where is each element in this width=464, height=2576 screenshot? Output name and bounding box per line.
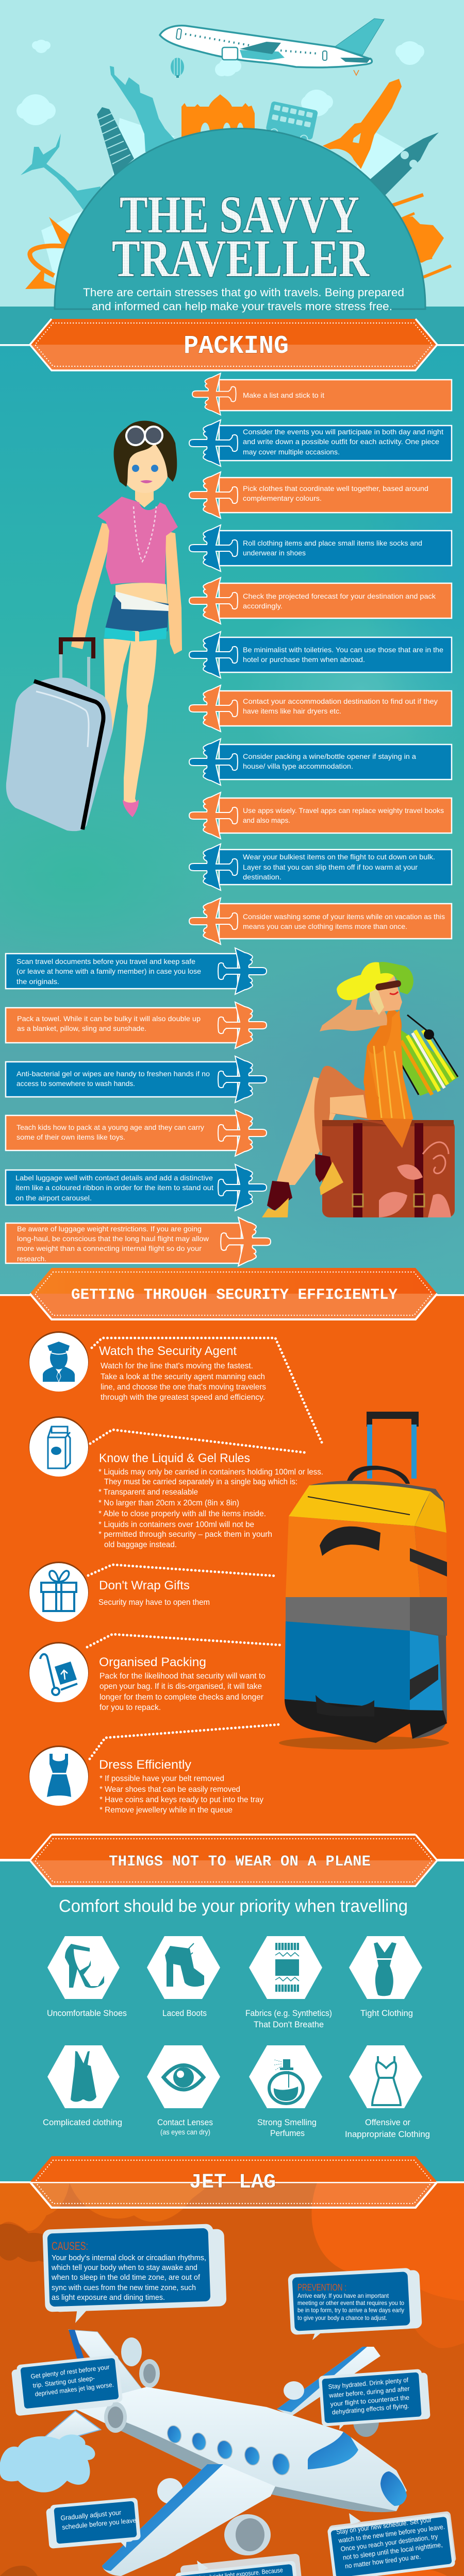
callout: rest: trip. Starting out sleep- — [32, 2375, 95, 2389]
item: uncomfortable shoes: Uncomfortable Shoes — [47, 2008, 127, 2018]
tip 1 — [192, 373, 452, 415]
tip 5: Check the projected forecast for your destination and pack — [243, 592, 436, 600]
item: offensive clothing: Offensive or — [365, 2117, 410, 2127]
tip 13: Pack a towel. While it can be bulky it will also double up — [17, 1014, 201, 1023]
tip 3: Pick clothes that coordinate well together, based around — [243, 484, 428, 493]
tip 17: research. — [17, 1255, 46, 1263]
icon: landmarks skyline — [21, 66, 451, 289]
tip: liquid and gel rules: * Able to close properly with all the items inside. — [98, 1510, 266, 1518]
tip 12: (or leave at home with a family member) in case you lose — [16, 967, 201, 975]
tip: dress efficiently — [29, 1724, 281, 1815]
tip: dress efficiently: * Wear shoes that can be easily removed — [100, 1785, 240, 1794]
tip 8: house/ villa type accommodation. — [243, 762, 353, 770]
tip 9 — [189, 792, 452, 839]
item: laced boots — [147, 1936, 220, 2018]
tip 10: Wear your bulkiest items on the flight to cut down on bulk. — [243, 853, 435, 861]
heading: things not to wear — [30, 1835, 437, 1886]
callout: prevention: be in top form, try to arrive a few days early — [297, 2307, 404, 2314]
callout: hydrated: dehydrating effects of flying. — [332, 2402, 409, 2416]
heading: packing: PACKING — [184, 332, 289, 361]
tip 8: Consider packing a wine/bottle opener if staying in a — [243, 752, 416, 760]
tip: liquid and gel rules: * No larger than 20cm x 20cm (8in x 8in) — [98, 1499, 239, 1507]
tip: liquid and gel rules: old baggage instead. — [104, 1540, 177, 1549]
item: contact lenses — [147, 2045, 220, 2136]
tip: don't wrap gifts — [29, 1562, 277, 1622]
tip: dress efficiently: * Remove jewellery while in the queue — [100, 1806, 233, 1815]
dotted connector — [92, 1338, 323, 1445]
tip 11: means you can use clothing items more than once. — [243, 922, 407, 930]
icon: security agent — [29, 1331, 89, 1392]
callout: prevention: meeting or other event that requires you to — [297, 2299, 404, 2307]
tip 10: destination. — [243, 873, 281, 881]
tip 7: have items like hair dryers etc. — [243, 707, 341, 715]
tip 15 — [6, 1110, 267, 1156]
callout: hydrated: water before, during and after — [328, 2385, 410, 2399]
tip 4: underwear in shoes — [243, 549, 306, 557]
tip 11 — [189, 898, 452, 944]
item: strong perfumes: Strong Smelling — [257, 2117, 317, 2127]
tip: dress efficiently: * If possible have your belt removed — [100, 1774, 224, 1783]
tip 16: on the airport carousel. — [15, 1194, 92, 1202]
tip 6: hotel or purchase them when abroad. — [243, 655, 365, 664]
tip 13 — [6, 1002, 267, 1048]
callout: causes: CAUSES: — [52, 2240, 88, 2252]
tip 7: Contact your accommodation destination to find out if they — [243, 697, 438, 705]
icon: clouds — [16, 40, 424, 125]
callout: prevention: to give your body a chance to adjust. — [297, 2314, 387, 2321]
illustration: big airplane — [0, 2330, 407, 2576]
item: laced boots: Laced Boots — [162, 2008, 207, 2018]
intro text: There are certain stresses that go with travels. Being prepared — [83, 286, 404, 299]
tip 7 — [189, 685, 452, 732]
item: fabrics: Fabrics (e.g. Synthetics) — [245, 2008, 332, 2018]
list: packing tips left column — [6, 948, 271, 1266]
tip: watch the security agent — [29, 1331, 323, 1445]
callout: causes: sync with cues from the new time zone, such — [52, 2283, 196, 2292]
callout: hydrated — [319, 2369, 430, 2430]
item: contact lenses: Contact Lenses — [157, 2117, 213, 2127]
tip: watch the security agent: Watch the Security Agent — [99, 1344, 237, 1358]
tip: organised packing: for you to repack. — [100, 1703, 161, 1712]
heading: things not to wear: THINGS NOT TO WEAR ON A PLANE — [109, 1853, 371, 1871]
tip 11: Consider washing some of your items while on vacation as this — [243, 912, 445, 921]
title: TRAVELLER — [112, 229, 370, 288]
callout: new schedule: Once you reach your destination, try — [340, 2532, 439, 2553]
tip: liquid and gel rules: * permitted through security – pack them in yourh — [98, 1530, 272, 1539]
tip: watch the security agent: through with the greatest speed and efficiency. — [101, 1393, 265, 1402]
tip 6: Be minimalist with toiletries. You can use those that are in the — [243, 646, 443, 654]
tip 16: item like a coloured ribbon in order for the item to stand out — [15, 1183, 213, 1192]
tip 12 — [6, 948, 267, 994]
panel: hero — [0, 0, 464, 345]
dotted connector — [88, 1565, 277, 1576]
item: uncomfortable shoes — [47, 1936, 127, 2018]
icon: dress — [29, 1745, 89, 1806]
callout: causes: when to sleep in the old time zone, are out of — [51, 2273, 201, 2282]
callout: hydrated: your flight to counteract the — [330, 2394, 410, 2408]
callout: causes: as light exposure and dining times. — [52, 2293, 165, 2302]
tip 17: Be aware of luggage weight restrictions. If you are going — [17, 1225, 202, 1233]
tip: don't wrap gifts: Don't Wrap Gifts — [99, 1579, 190, 1592]
heading: packing — [30, 319, 437, 370]
callout: causes: Your body's internal clock or circadian rhythms, — [52, 2253, 206, 2262]
tip 3 — [189, 472, 452, 518]
item: fabrics — [245, 1936, 332, 2029]
panel: packing background — [0, 344, 464, 1295]
tip: liquid and gel rules — [29, 1416, 323, 1549]
tip 10 — [189, 844, 452, 890]
tip: dress efficiently: * Have coins and keys ready to put into the tray — [100, 1795, 263, 1804]
tip 15: Teach kids how to pack at a young age and they can carry — [16, 1123, 204, 1131]
callout: causes — [42, 2224, 227, 2323]
item: complicated clothing — [43, 2045, 122, 2127]
tip 12: Scan travel documents before you travel and keep safe — [16, 957, 195, 965]
tip 15: some of their own items like toys. — [16, 1133, 125, 1141]
heading: getting through security — [30, 1268, 437, 1319]
tip 8 — [189, 739, 452, 785]
tip 4: Roll clothing items and place small items like socks and — [243, 539, 422, 547]
tip: liquid and gel rules: * Transparent and resealable — [98, 1488, 198, 1497]
item: tight clothing: Tight Clothing — [360, 2008, 413, 2018]
callout: gradually adjust: Gradually adjust your — [60, 2509, 122, 2522]
tip 17: long-haul, be conscious that the long haul flight may allow — [17, 1234, 209, 1243]
callout: prevention: PREVENTION : — [297, 2282, 346, 2293]
dotted connector — [90, 1430, 308, 1453]
item: offensive clothing — [345, 2045, 430, 2139]
callout: new schedule: Stay on your new schedule. Set your — [336, 2516, 432, 2536]
item: contact lenses: (as eyes can dry) — [160, 2128, 210, 2136]
tip 14: Anti-bacterial gel or wipes are handy to freshen hands if no — [16, 1070, 210, 1078]
title: THE SAVVY — [120, 185, 359, 244]
tip 4 — [189, 525, 452, 571]
heading: jet lag — [30, 2156, 437, 2208]
callout: prevention: Arrive early. If you have an important — [297, 2292, 389, 2299]
dotted connector — [87, 1634, 281, 1647]
tip: watch the security agent: line, and choose the one that's moving travelers — [101, 1383, 266, 1392]
tip: organised packing: Organised Packing — [99, 1655, 206, 1669]
tip: liquid and gel rules: * Liquids in containers over 100ml will not be — [98, 1520, 254, 1529]
callout: prevention — [288, 2268, 422, 2340]
callout: new schedule — [327, 2511, 456, 2576]
tip 5 — [189, 578, 452, 624]
tip 3: complementary colours. — [243, 494, 322, 502]
tip: organised packing: open your bag. If it is dis-organised, it will take — [100, 1682, 262, 1691]
tip 6 — [189, 632, 452, 678]
tip 17 — [6, 1217, 271, 1266]
tip: organised packing — [29, 1634, 281, 1712]
item: complicated clothing: Complicated clothing — [43, 2117, 122, 2127]
subheading: comfort: Comfort should be your priority when travelling — [59, 1896, 408, 1916]
callout: rest — [11, 2354, 123, 2416]
callout: new schedule: no matter how tired you are. — [344, 2552, 421, 2570]
icon: gift — [29, 1562, 89, 1622]
tip: organised packing: Pack for the likelihood that security will want to — [100, 1672, 266, 1681]
callout: new schedule: watch to the new time before you leave. — [338, 2523, 445, 2545]
tip 16 — [6, 1164, 267, 1211]
heading: getting through security: GETTING THROUGH SECURITY EFFICIENTLY — [71, 1286, 397, 1304]
tip 2: Consider the events you will participate in both day and night — [243, 428, 443, 436]
tip 12: the originals. — [16, 977, 59, 986]
tip 2: and write down a possible outfit for each activity. One piece — [243, 437, 439, 446]
dome — [55, 129, 425, 309]
tip 10: Layer so that you can slip them off if too warm at your — [243, 863, 418, 871]
list: security tips — [29, 1331, 323, 1815]
tip 2: may cover multiple occasions. — [243, 448, 340, 456]
panel: things not to wear background — [0, 1859, 464, 2184]
tip: liquid and gel rules: Know the Liquid & Gel Rules — [99, 1451, 250, 1465]
panel: jet lag background — [0, 2181, 464, 2576]
tip: watch the security agent: Watch for the line that's moving the fastest. — [101, 1362, 253, 1370]
list: packing tips right column — [189, 373, 452, 944]
icon: hand trolley — [29, 1642, 89, 1702]
callouts: jet lag — [11, 2224, 456, 2576]
title — [112, 185, 370, 288]
intro text — [83, 286, 404, 313]
callout: gradually adjust — [46, 2498, 141, 2549]
tip 1: Make a list and stick to it — [243, 391, 324, 399]
callout: rest: Get plenty of rest before your — [30, 2363, 110, 2380]
icon: carton — [29, 1416, 89, 1477]
grid: things not to wear — [43, 1936, 430, 2139]
tip 9: Use apps wisely. Travel apps can replace weighty travel books — [243, 806, 444, 815]
callout: new schedule: not to sleep until the local nighttime, — [342, 2540, 443, 2562]
tip 13: as a blanket, pillow, sling and sunshade. — [17, 1024, 146, 1032]
panel: security background — [0, 1294, 464, 1861]
heading: jet lag: JET LAG — [189, 2171, 276, 2194]
tip: watch the security agent: Take a look at the security agent manning each — [101, 1372, 265, 1381]
illustration: rolling suitcase — [279, 1412, 449, 1750]
item: tight clothing — [349, 1936, 422, 2018]
illustration: girl with suitcase — [6, 421, 182, 831]
callout: gradually adjust: schedule before you leave. — [62, 2516, 138, 2531]
item: fabrics: That Don't Breathe — [254, 2020, 324, 2029]
tip 9: and also maps. — [243, 816, 290, 824]
tip: don't wrap gifts: Security may have to open them — [98, 1598, 210, 1607]
callout: rest: deprived makes jet lag worse. — [35, 2381, 114, 2398]
tip 14 — [6, 1056, 267, 1103]
callout: bright light — [175, 2553, 305, 2576]
tip 2 — [189, 420, 452, 466]
item: strong perfumes — [249, 2045, 322, 2138]
dotted connector — [90, 1724, 281, 1759]
icon: airplane — [160, 19, 384, 75]
tip 16: Label luggage well with contact details and add a distinctive — [15, 1174, 213, 1182]
tip: liquid and gel rules: * Liquids may only be carried in containers holding 100ml or less. — [98, 1468, 323, 1477]
tip 17: more weight than a connecting internal flight so do your — [17, 1244, 202, 1252]
item: strong perfumes: Perfumes — [270, 2128, 305, 2138]
callout: hydrated: Stay hydrated. Drink plenty of — [328, 2376, 409, 2391]
callout: causes: which tell your body when to stay awake and — [51, 2263, 197, 2272]
intro text: and informed can help make your travels more stress free. — [92, 300, 392, 313]
tip 14: access to somewhere to wash hands. — [16, 1079, 135, 1088]
illustration: woman on suitcase — [262, 962, 459, 1217]
tip: organised packing: longer for them to complete checks and longer — [100, 1693, 264, 1702]
item: offensive clothing: Inappropriate Clothing — [345, 2129, 430, 2139]
icon: hot air balloon — [171, 58, 184, 78]
tip: liquid and gel rules: They must be carried separately in a single bag which is: — [104, 1478, 297, 1486]
tip 5: accordingly. — [243, 602, 283, 610]
tip: dress efficiently: Dress Efficiently — [99, 1758, 191, 1772]
